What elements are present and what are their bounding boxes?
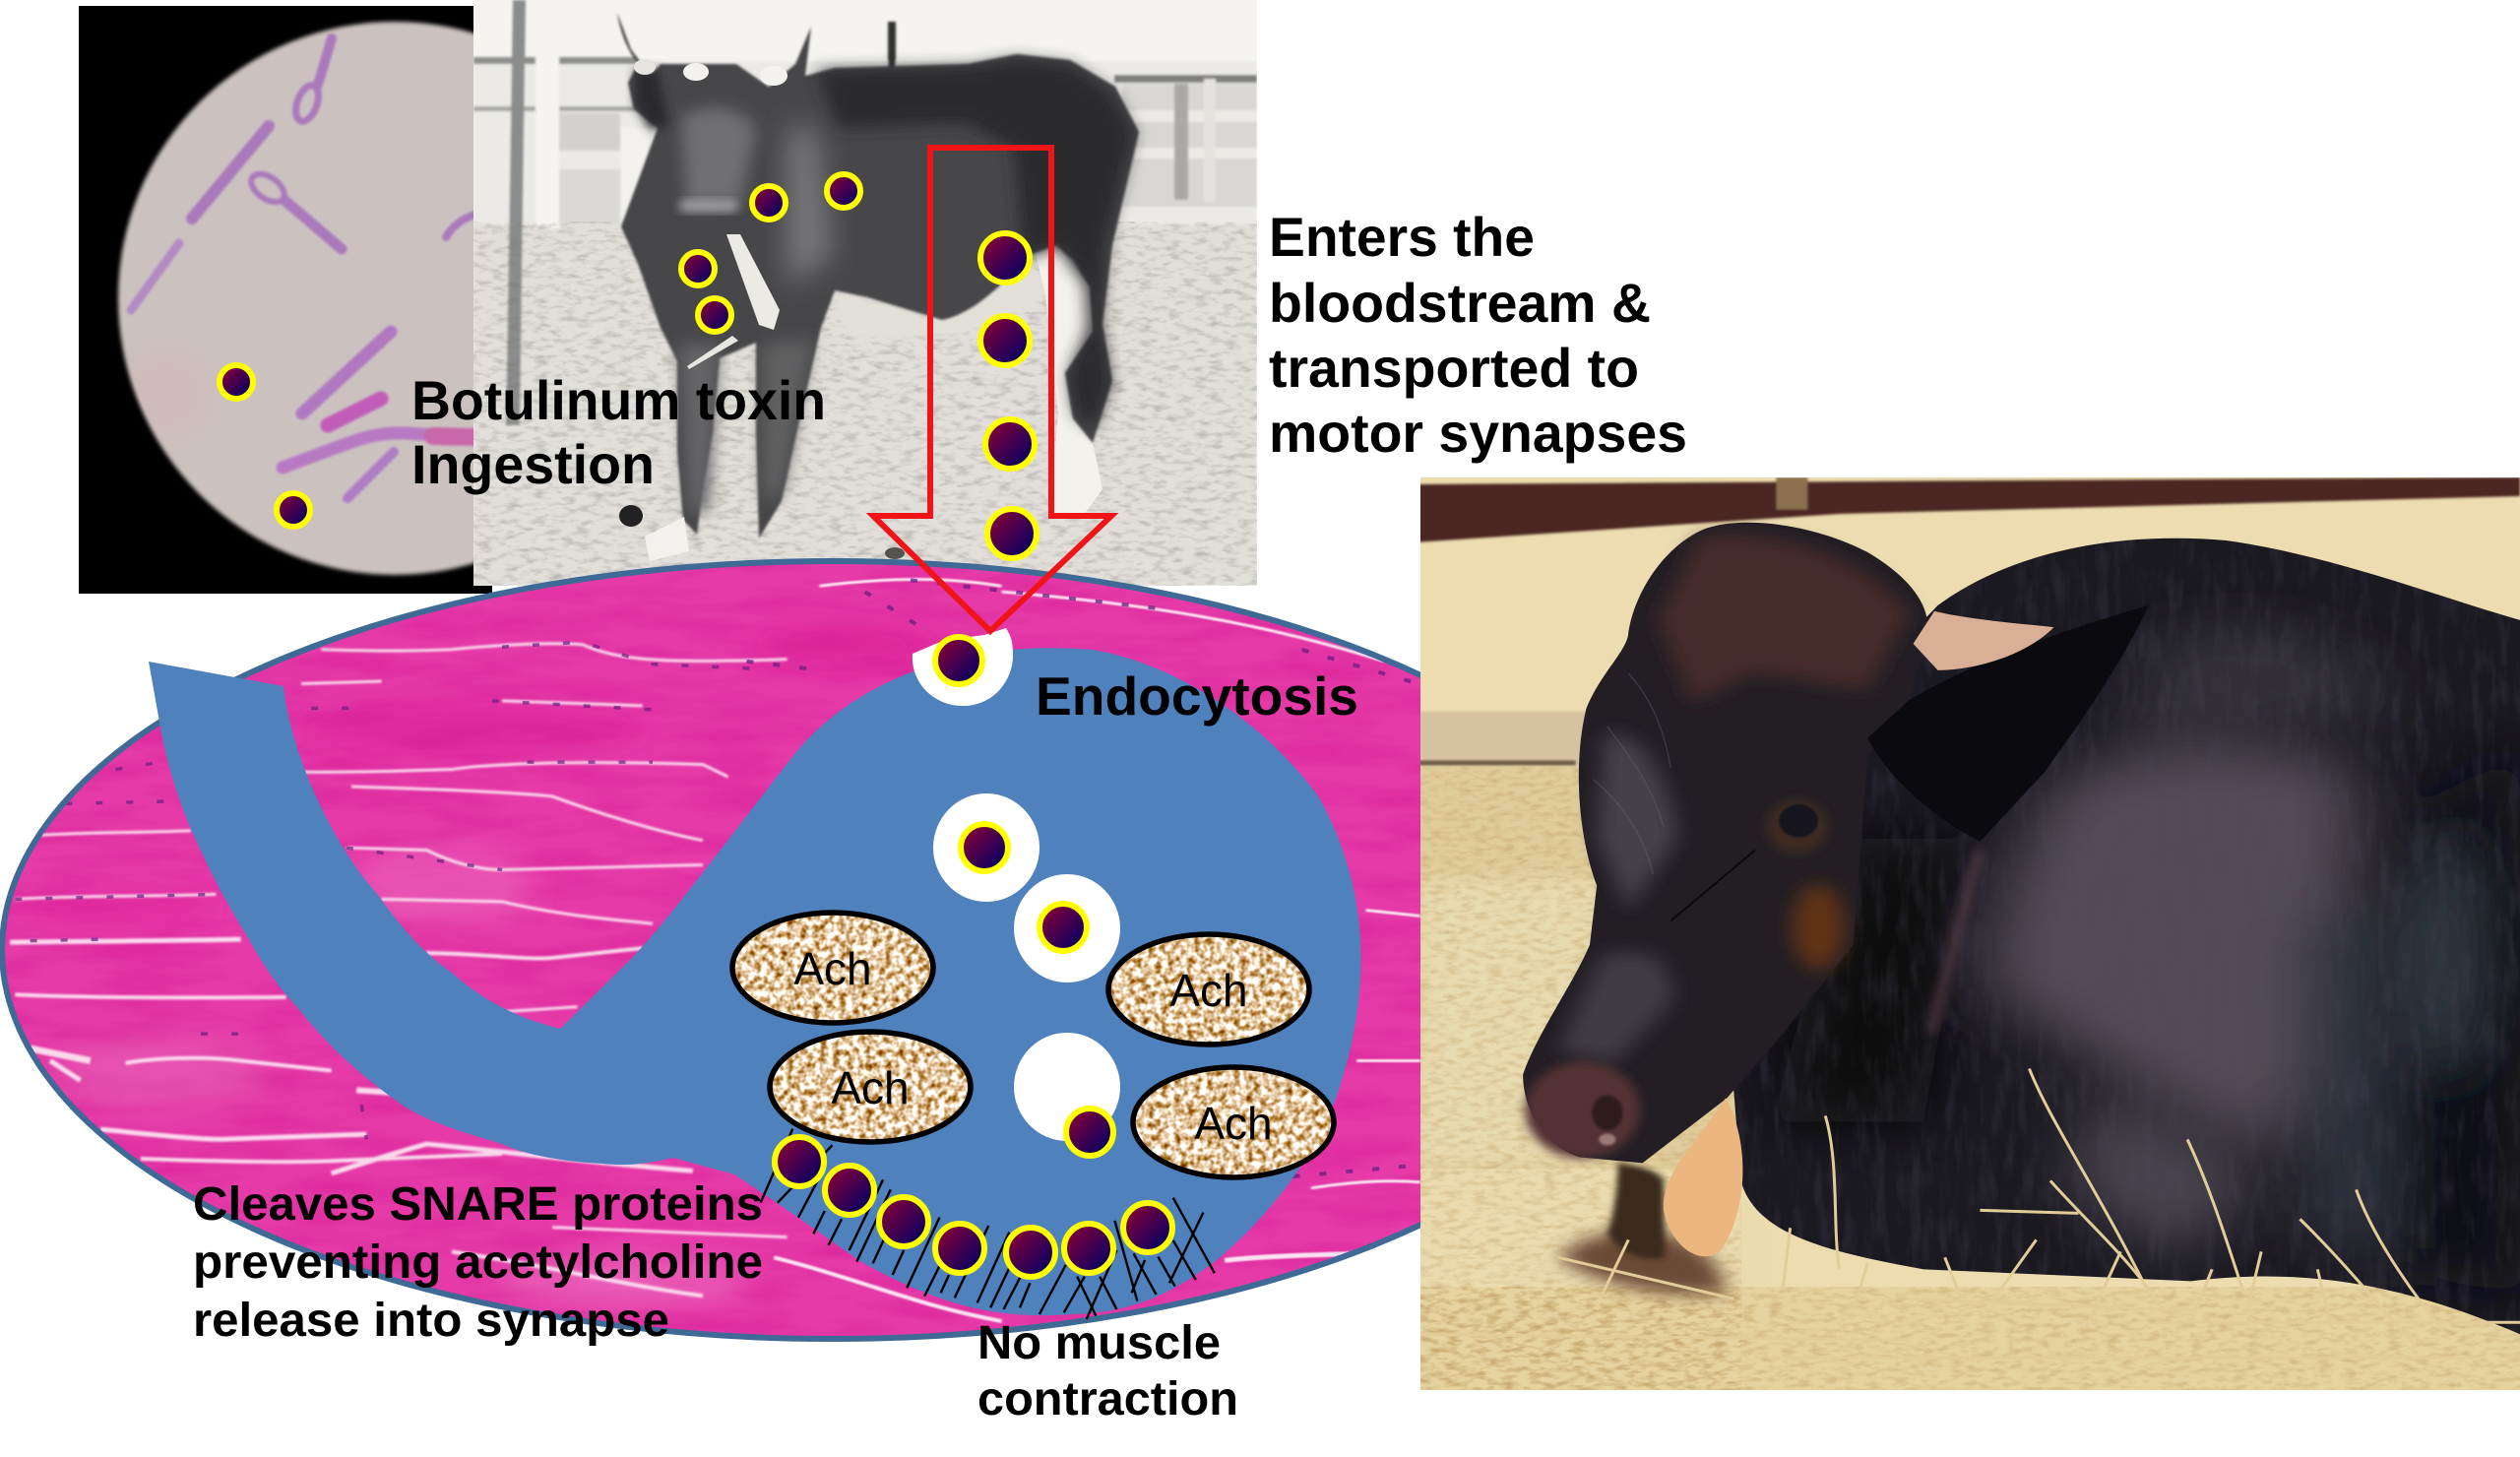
muscle fibre texture: [0, 551, 1427, 1349]
label: no muscle contraction: No muscle: [977, 1317, 1221, 1369]
label: botulinum toxin ingestion: [411, 369, 826, 495]
bull head: [1523, 523, 1927, 1163]
vesicles in nerve terminal: [933, 793, 1120, 1141]
red downward arrow: [873, 148, 1111, 631]
motor neuron terminal shape: [149, 648, 1361, 1315]
pinkish stain on slide: [129, 367, 159, 439]
toxin particles in bloodstream arrow: [980, 233, 1037, 558]
straw ground: [1418, 767, 2520, 1399]
eye: [1766, 799, 1828, 854]
label: enters the bloodstream: [1269, 206, 1687, 464]
label: endocytosis: Endocytosis: [1036, 665, 1358, 727]
fence rails: [1418, 477, 2520, 766]
acetylcholine vesicle 1: Ach: [793, 943, 872, 994]
panel: photo of paralysed bull with tongue protruding: [1418, 473, 2520, 1399]
cow face highlights: [681, 108, 756, 207]
toxin particles at SNARE membrane: [775, 1137, 1172, 1277]
panel: muscle tissue ellipse: [0, 558, 1420, 1342]
lolling tongue: [1664, 1098, 1742, 1256]
toxin particles inside nerve terminal: [935, 637, 1113, 1156]
label: no muscle contraction: [977, 1317, 1238, 1425]
acetylcholine vesicle 4: Ach: [1194, 1098, 1273, 1149]
acetylcholine vesicle 1: [730, 911, 935, 1025]
panel: black and white photo of emaciated cow: [473, 0, 1257, 586]
head shading: [1558, 535, 1910, 1063]
label: enters the bloodstream: transported to: [1269, 337, 1639, 399]
toxin particles on cow: [681, 174, 860, 332]
muzzle: [1525, 1061, 1640, 1159]
label: cleaves SNARE proteins: [193, 1178, 763, 1347]
label: cleaves SNARE proteins: Cleaves SNARE proteins: [193, 1178, 763, 1231]
acetylcholine vesicle 2: [768, 1030, 973, 1144]
cow silhouette: [617, 13, 1139, 561]
acetylcholine vesicle 3: [1106, 932, 1311, 1046]
panel: microscope image of Clostridium bacteria: [79, 6, 492, 594]
label: cleaves SNARE proteins: release into synapse: [193, 1295, 669, 1347]
label: enters the bloodstream: Enters the: [1269, 206, 1535, 268]
horn: [1914, 611, 2053, 670]
ear: [1867, 605, 2149, 842]
endocytosis vesicle crescent: [913, 628, 1013, 706]
acetylcholine vesicle 2: Ach: [831, 1062, 910, 1113]
toxin particles on microscope image: [220, 365, 310, 527]
bacteria rods: [131, 38, 474, 498]
label: no muscle contraction: contraction: [977, 1373, 1238, 1425]
label: botulinum toxin ingestion: Botulinum toxin: [411, 369, 826, 431]
bull body: [1727, 532, 2520, 1340]
acetylcholine vesicle 3: Ach: [1169, 965, 1248, 1016]
label: cleaves SNARE proteins: preventing acetylcholine: [193, 1236, 763, 1289]
SNARE protein hatch lines: [761, 1129, 1215, 1319]
label: enters the bloodstream: motor synapses: [1269, 402, 1687, 464]
label: enters the bloodstream: bloodstream &: [1269, 272, 1651, 334]
acetylcholine vesicle 4: [1131, 1065, 1336, 1179]
dry grass stalks: [1418, 1068, 2520, 1358]
label: botulinum toxin ingestion: Ingestion: [411, 433, 655, 495]
farm background: [473, 0, 1257, 586]
beard under chin: [1607, 1163, 1665, 1259]
